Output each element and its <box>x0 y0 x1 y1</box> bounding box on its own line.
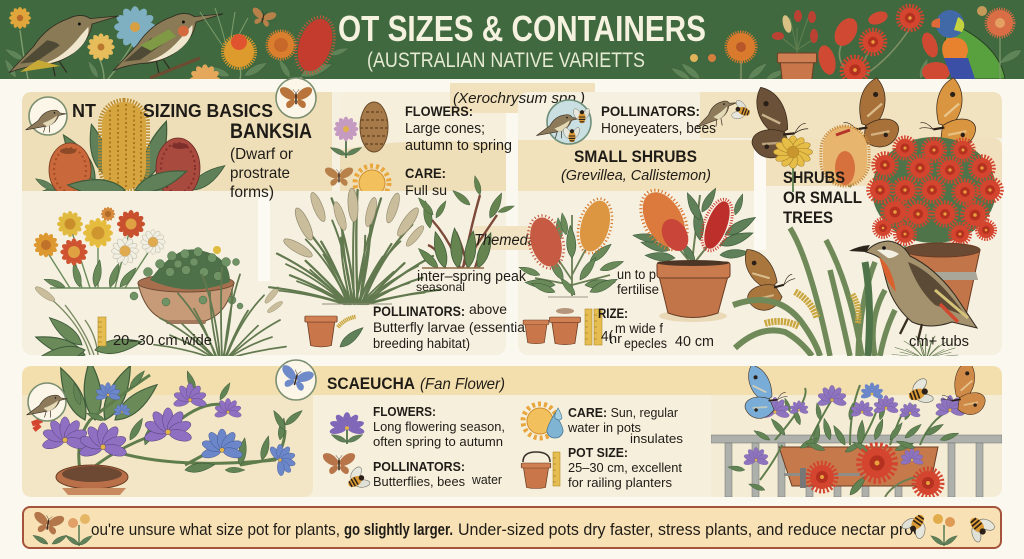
text: scaevola care and pot size: POT SIZE: <box>568 445 628 460</box>
illustration: banksia cones <box>35 98 226 191</box>
illustration: banksia cone right <box>821 126 869 188</box>
text: prune and fertilise <box>617 267 659 297</box>
text: scaevola flowers and pollinators: FLOWERS: <box>373 405 436 419</box>
heading: shrubs or small trees <box>783 168 862 227</box>
text: pollinators butterfly larvae <box>373 301 528 351</box>
illustration: grevillea shrub <box>518 195 625 297</box>
text: scaevola care and pot size: insulates <box>630 431 684 446</box>
illustration: flowering tree <box>869 137 1001 260</box>
text: winter spring peak seasonal: inter–spring peak <box>417 269 527 285</box>
icon: butterfly and bee <box>323 453 373 496</box>
text: size: m wide f <box>615 321 663 336</box>
railing <box>711 435 1002 497</box>
illustration: balcony railing planter <box>711 358 1002 497</box>
illustration: daisy cluster <box>34 207 165 290</box>
illustration: brown side butterfly <box>728 236 802 316</box>
text: size: epecles <box>624 336 667 351</box>
planter <box>779 447 938 488</box>
text: pollinators honeyeaters <box>601 103 716 137</box>
header left flora and birds <box>4 6 348 79</box>
illustration: honeyeater bird <box>849 241 977 340</box>
icon: flowers <box>64 514 94 547</box>
icon: bee right <box>961 509 999 546</box>
text: size: 4( <box>601 328 613 345</box>
badge: butterfly <box>276 78 316 118</box>
heading: scaevola: SCAEUCHA <box>327 375 415 393</box>
heading: banksia <box>230 120 312 201</box>
heading: banksia: (Dwarf or <box>230 146 294 163</box>
header right flora and lorikeet <box>670 4 1022 79</box>
icon: ruler left <box>98 317 106 346</box>
text: banksia flowers and care <box>405 103 512 198</box>
illustration: yellow flower <box>774 136 812 192</box>
text: size <box>598 306 714 351</box>
heading: scaevola <box>327 375 505 393</box>
text: scaevola flowers and pollinators: often spring to autumn <box>373 434 503 449</box>
section heading: plant sizing basics: SIZING BASICS <box>143 101 273 121</box>
label: tubs size: cm+ tubs <box>909 333 969 350</box>
text: pollinators honeyeaters: POLLINATORS: <box>601 103 700 119</box>
red flowers <box>809 447 941 497</box>
illustration: orange butterfly <box>920 78 976 147</box>
heading: shrubs or small trees: TREES <box>783 208 833 227</box>
bee <box>908 378 934 403</box>
text: scaevola care and pot size: water in pots <box>567 420 641 435</box>
illustration: scaevola in pot <box>32 359 304 495</box>
text: scaevola care and pot size: CARE: Sun, regular <box>568 405 679 420</box>
footer text <box>91 520 922 539</box>
text: scaevola flowers and pollinators: Butterflies, bees <box>373 474 465 489</box>
heading: shrubs or small trees: OR SMALL <box>783 188 862 207</box>
text: pollinators honeyeaters: Honeyeaters, bees <box>601 121 716 137</box>
icon: butterfly on flower <box>32 511 68 546</box>
text: prune and fertilise: fertilise <box>617 282 659 297</box>
text: banksia flowers and care: CARE: <box>405 165 446 181</box>
illustration: large tub <box>904 243 980 320</box>
section heading: plant sizing basics <box>72 101 273 121</box>
text: banksia flowers and care: FLOWERS: <box>405 103 473 119</box>
heading: small shrubs <box>561 148 711 184</box>
icon: bee <box>898 508 934 543</box>
heading: banksia: prostrate <box>230 165 290 182</box>
text: pollinators butterfly larvae: above <box>469 301 507 317</box>
text: pollinators butterfly larvae: breeding habitat) <box>373 336 470 351</box>
footer callout <box>23 507 1001 548</box>
label: themeda: Themeda <box>474 232 536 249</box>
icon: small pot, caterpillar and leaf <box>305 315 366 350</box>
illustration: caterpillars on leaves <box>733 228 958 358</box>
icon: yellow flowers <box>929 514 959 547</box>
heading: banksia: BANKSIA <box>230 120 312 143</box>
icon: small pots and rulers <box>523 308 602 345</box>
footer text: go slightly larger. <box>344 520 453 539</box>
header banner <box>0 0 1024 79</box>
text: scaevola care and pot size: for railing planters <box>568 475 673 490</box>
icon: purple flower <box>329 412 365 444</box>
text: winter spring peak seasonal: seasonal <box>416 280 465 294</box>
label: size 20-30 cm: 20–30 cm wide <box>113 332 212 349</box>
text: banksia flowers and care: autumn to spring <box>405 138 512 154</box>
text: scaevola flowers and pollinators <box>373 405 505 489</box>
heading: small shrubs: (Grevillea, Callistemon) <box>561 168 711 184</box>
illustration: kangaroo paw <box>416 175 515 271</box>
text: pollinators butterfly larvae: POLLINATORS: <box>373 303 465 319</box>
text: winter spring peak seasonal <box>416 269 527 294</box>
text: banksia flowers and care: Large cones; <box>405 121 485 137</box>
panel: bottom row background <box>22 366 1002 497</box>
text: prune and fertilise: un to p <box>617 267 656 282</box>
panel: row one backgrounds <box>22 83 1002 355</box>
subtitle: (AUSTRALIAN NATIVE VARIETTS <box>367 49 645 72</box>
icon: small bird and bee <box>693 98 753 130</box>
text: banksia flowers and care: Full su <box>405 182 447 198</box>
illustration: lower left grasses <box>33 268 286 365</box>
text: scaevola care and pot size: 25–30 cm, excellent <box>568 460 682 475</box>
badge: bird <box>26 97 67 135</box>
text: size: hr <box>609 331 623 346</box>
illustration: brown butterfly <box>739 78 813 162</box>
blue butterfly <box>744 366 788 419</box>
icon: pot and ruler <box>521 452 560 489</box>
icon: banksia cone <box>360 102 388 152</box>
badge: bird and bees <box>536 100 591 144</box>
text: size: RIZE: <box>598 306 628 321</box>
heading: banksia: forms) <box>230 184 274 201</box>
orange butterfly <box>941 360 985 415</box>
text: scaevola flowers and pollinators: water <box>471 472 503 487</box>
heading: shrubs or small trees: SHRUBS <box>783 168 845 187</box>
title: OT SIZES & CONTAINERS <box>338 8 706 49</box>
text: scaevola flowers and pollinators: Long flowering season, <box>373 419 505 434</box>
icon: pink flower <box>329 117 363 158</box>
illustration: potted grevillea and callistemon <box>631 182 758 322</box>
icon: sun and water drops <box>523 404 563 438</box>
illustration: themeda grass <box>269 188 441 304</box>
illustration: butterfly on banksia <box>843 78 899 147</box>
text: scaevola flowers and pollinators: POLLINATORS: <box>373 460 465 474</box>
text: scaevola care and pot size <box>567 405 684 490</box>
heading: small shrubs: SMALL SHRUBS <box>574 148 697 166</box>
icon: butterfly and sun <box>324 164 392 191</box>
badge: bird bottom <box>27 383 67 421</box>
footer text: ou're unsure what size pot for plants, <box>91 520 340 539</box>
section heading: plant sizing basics: NT <box>72 101 96 121</box>
label: xerochrysum: (Xerochrysum spp.) <box>453 91 585 107</box>
footer text: Under-sized pots dry faster, stress plants, and reduce nectar prod <box>458 520 922 539</box>
heading: scaevola: (Fan Flower) <box>420 376 505 393</box>
illustration: bowl planter <box>130 246 243 324</box>
text: pollinators butterfly larvae: Butterfly larvae (essential <box>373 320 528 335</box>
foliage <box>727 382 965 497</box>
badge: blue butterfly <box>276 360 316 400</box>
text: size: 40 cm <box>675 334 714 350</box>
